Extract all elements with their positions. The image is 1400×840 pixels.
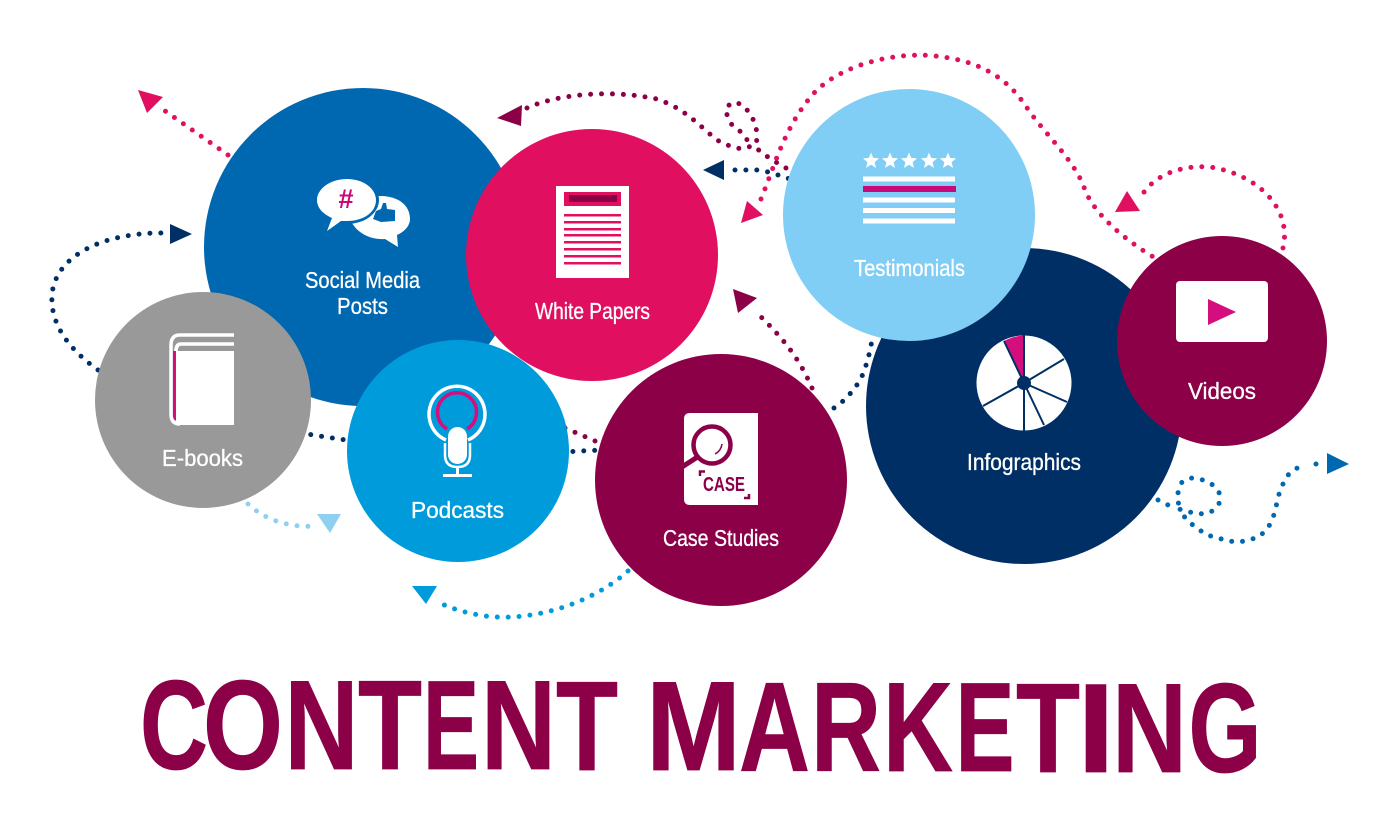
connector: navy e-books to podcasts	[300, 433, 352, 441]
icon: book	[171, 335, 234, 425]
connector: navy case studies to testimonials	[834, 340, 872, 408]
arrow: light blue e-books to podcasts	[248, 504, 341, 533]
title: O	[203, 654, 283, 796]
title: N	[284, 654, 358, 796]
label: Podcasts	[411, 497, 504, 523]
title: T	[556, 655, 618, 797]
icon: hash: #	[338, 184, 354, 214]
icon: video player	[1176, 281, 1268, 342]
panel: testimonials	[783, 89, 1035, 341]
connector: maroon podcasts to case studies	[565, 428, 602, 444]
connector: navy podcasts to case studies	[562, 450, 602, 452]
label: Videos	[1188, 378, 1256, 404]
title: N	[1112, 657, 1187, 799]
title: E	[956, 656, 1014, 798]
label: Case Studies	[663, 525, 779, 551]
panel: videos	[1117, 236, 1327, 446]
arrow: pink top left	[138, 90, 228, 155]
panel: podcasts	[347, 340, 569, 562]
title: G	[1188, 657, 1262, 799]
label: Posts	[337, 293, 388, 319]
arrow: navy testimonials to white papers	[703, 160, 790, 180]
panel: infographics	[866, 248, 1182, 564]
arrow: long pink dotted curve	[741, 55, 1155, 258]
title: M	[646, 655, 741, 797]
label: E-books	[162, 445, 243, 471]
panel: e-books	[95, 292, 311, 508]
panel: social media posts	[204, 88, 522, 406]
icon: pie chart	[976, 335, 1072, 431]
icon: case document	[682, 413, 758, 505]
icon: microphone	[429, 386, 485, 477]
arrow: blue loop to right	[1158, 453, 1349, 542]
arrow: maroon case studies to top	[733, 289, 812, 388]
title: K	[883, 656, 953, 798]
arrow: maroon loop to white papers	[497, 94, 786, 168]
title: T	[358, 654, 422, 796]
title: E	[423, 654, 479, 796]
label: Testimonials	[854, 255, 965, 281]
arrow: navy loop to social media	[52, 224, 192, 370]
panel: white papers	[466, 129, 718, 381]
panel: case studies	[595, 354, 847, 606]
icon: stars and lines	[863, 152, 956, 224]
icon: speech bubbles	[315, 176, 410, 247]
label: case: CASE	[703, 474, 745, 496]
label: White Papers	[535, 298, 650, 324]
title: N	[481, 654, 556, 796]
arrow: pink videos loop	[1115, 167, 1285, 248]
arrow: blue case studies to podcasts	[412, 571, 628, 617]
title: A	[739, 656, 810, 798]
icon: document	[556, 186, 629, 278]
title: T	[1016, 657, 1080, 799]
title: R	[811, 656, 881, 798]
title: C	[140, 654, 208, 796]
label: Social Media	[305, 267, 420, 293]
label: Infographics	[967, 449, 1081, 475]
title: I	[1077, 657, 1115, 799]
